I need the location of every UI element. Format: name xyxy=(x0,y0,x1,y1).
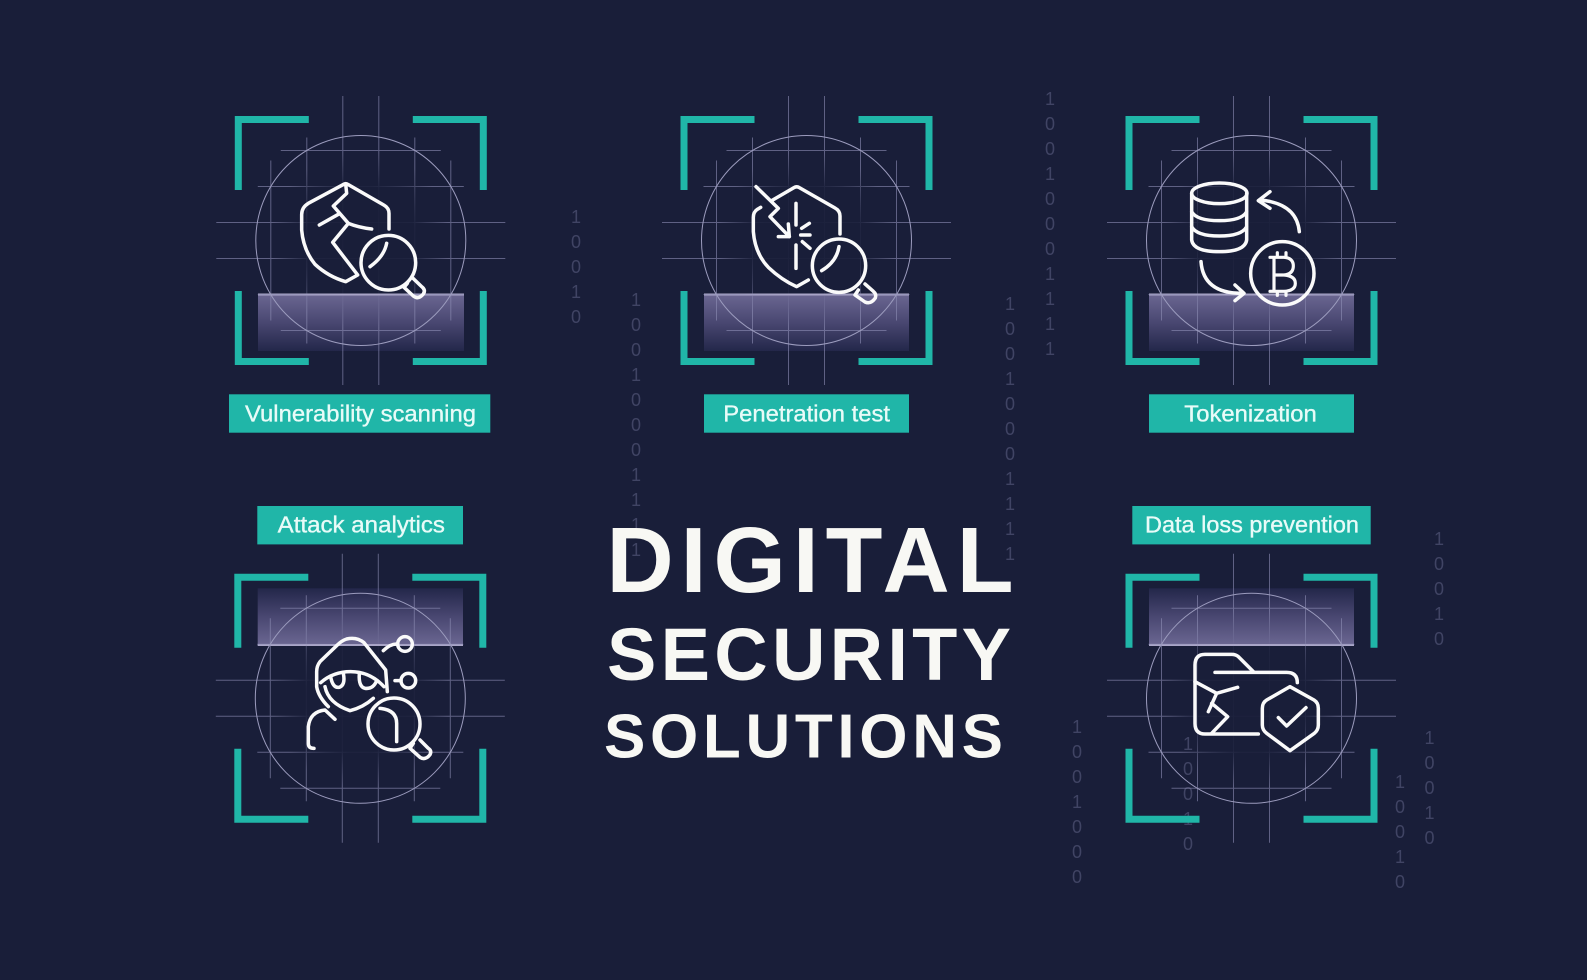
corner brackets xyxy=(1129,577,1374,819)
binary column left centre: 1 xyxy=(631,465,641,485)
binary column right centre: 1 xyxy=(1005,494,1015,514)
panel: data loss prevention xyxy=(1107,506,1396,843)
binary column left centre: 1 xyxy=(631,540,641,560)
binary column top centre: 1 xyxy=(1045,314,1055,334)
binary column top centre: 1 xyxy=(1045,89,1055,109)
icon: cracked folder with shield xyxy=(1195,654,1318,751)
binary column top centre: 0 xyxy=(1045,114,1055,134)
binary column lower right a: 0 xyxy=(1395,822,1405,842)
circle xyxy=(256,136,466,346)
binary column lower right b: 0 xyxy=(1424,778,1435,798)
binary column lower left of data loss panel: 0 xyxy=(1072,817,1082,837)
binary column lower right b: 1 xyxy=(1424,728,1435,748)
binary column top centre: 1 xyxy=(1045,339,1055,359)
binary column left centre: 0 xyxy=(631,340,641,360)
binary column top centre: 0 xyxy=(1045,139,1055,159)
binary column lower left of data loss panel: 1 xyxy=(1072,717,1082,737)
binary column right centre: 1 xyxy=(1005,519,1015,539)
binary column right centre: 1 xyxy=(1005,294,1015,314)
binary column right centre: 0 xyxy=(1005,419,1015,439)
binary column right centre: 0 xyxy=(1005,319,1015,339)
circle xyxy=(1146,136,1356,346)
corner brackets xyxy=(1129,120,1374,362)
scan band xyxy=(1149,588,1354,646)
panel: vulnerability scanning xyxy=(216,96,505,433)
label: Data loss prevention: Data loss prevention xyxy=(1145,512,1359,538)
title line: SOLUTIONS: SOLUTIONS xyxy=(604,702,1003,772)
icon: cracked shield with magnifier xyxy=(302,184,424,298)
binary column far right: 0 xyxy=(1434,554,1444,574)
label: Tokenization xyxy=(1149,394,1354,433)
binary column right centre: 1 xyxy=(1005,469,1015,489)
binary column lower right a: 0 xyxy=(1395,797,1405,817)
title xyxy=(604,508,1014,772)
binary column left centre: 1 xyxy=(631,290,641,310)
binary column left centre: 1 xyxy=(631,490,641,510)
binary column lower left of data loss panel: 0 xyxy=(1072,767,1082,787)
grid lines xyxy=(1107,96,1396,385)
panel: penetration test xyxy=(662,96,951,433)
binary column lower right a: 1 xyxy=(1395,772,1405,792)
binary column right centre: 0 xyxy=(1005,344,1015,364)
grid lines xyxy=(216,554,505,843)
label: Attack analytics xyxy=(257,506,463,544)
binary column right centre: 0 xyxy=(1005,444,1015,464)
binary column top centre: 0 xyxy=(1045,189,1055,209)
scan band xyxy=(258,294,464,351)
binary column far right: 1 xyxy=(1434,604,1444,624)
title line: DIGITAL: DIGITAL xyxy=(606,508,1014,612)
binary column inside data loss panel: 1 xyxy=(1183,809,1193,829)
label: Tokenization: Tokenization xyxy=(1184,400,1317,426)
circle xyxy=(255,593,465,803)
binary column far right: 1 xyxy=(1434,529,1444,549)
binary column top centre: 0 xyxy=(1045,239,1055,259)
binary column inside data loss panel: 1 xyxy=(1183,734,1193,754)
label: Penetration test xyxy=(704,394,909,433)
grid lines xyxy=(1107,554,1396,843)
binary column left centre: 1 xyxy=(631,365,641,385)
binary column left centre: 0 xyxy=(631,390,641,410)
binary column lower left of data loss panel: 0 xyxy=(1072,842,1082,862)
icon: database and bitcoin exchange xyxy=(1192,183,1314,305)
scan band xyxy=(1149,294,1354,351)
panel: attack analytics xyxy=(216,506,505,843)
binary column far left top: 0 xyxy=(571,307,581,327)
binary column left centre: 0 xyxy=(631,315,641,335)
binary column lower left of data loss panel: 0 xyxy=(1072,742,1082,762)
binary column inside data loss panel: 0 xyxy=(1183,784,1193,804)
binary column inside data loss panel: 0 xyxy=(1183,759,1193,779)
label: Vulnerability scanning: Vulnerability scanning xyxy=(245,400,476,426)
binary column inside data loss panel: 0 xyxy=(1183,834,1193,854)
icon: shield with attack arrow and magnifier xyxy=(753,187,876,303)
binary column lower right b: 0 xyxy=(1424,753,1435,773)
scan band xyxy=(704,294,909,351)
grid lines xyxy=(216,96,505,385)
corner brackets xyxy=(684,120,929,362)
binary column lower right b: 1 xyxy=(1424,803,1435,823)
scan band xyxy=(258,588,463,646)
label: Data loss prevention xyxy=(1132,506,1371,544)
binary column top centre: 1 xyxy=(1045,264,1055,284)
binary column far right: 0 xyxy=(1434,579,1444,599)
icon: hooded hacker with magnifier xyxy=(308,637,431,759)
binary column lower right a: 0 xyxy=(1395,872,1405,892)
binary column far left top: 1 xyxy=(571,207,581,227)
binary column right centre: 1 xyxy=(1005,544,1015,564)
binary column far left top: 1 xyxy=(571,282,581,302)
grid lines xyxy=(662,96,951,385)
binary column left centre: 0 xyxy=(631,415,641,435)
binary column top centre: 1 xyxy=(1045,164,1055,184)
binary column lower right a: 1 xyxy=(1395,847,1405,867)
binary column lower right b: 0 xyxy=(1424,828,1435,848)
binary column right centre: 1 xyxy=(1005,369,1015,389)
circle xyxy=(702,136,912,346)
binary column far right: 0 xyxy=(1434,629,1444,649)
label: Vulnerability scanning xyxy=(229,394,490,433)
binary column left centre: 1 xyxy=(631,515,641,535)
binary column lower left of data loss panel: 0 xyxy=(1072,867,1082,887)
corner brackets xyxy=(238,120,483,362)
label: Penetration test: Penetration test xyxy=(723,400,891,426)
binary column left centre: 0 xyxy=(631,440,641,460)
binary column top centre: 1 xyxy=(1045,289,1055,309)
circle xyxy=(1146,593,1356,803)
corner brackets xyxy=(238,577,483,819)
binary column top centre: 0 xyxy=(1045,214,1055,234)
binary column lower left of data loss panel: 1 xyxy=(1072,792,1082,812)
binary column far left top: 0 xyxy=(571,257,581,277)
label: Attack analytics: Attack analytics xyxy=(278,512,445,538)
title line: SECURITY: SECURITY xyxy=(607,613,1011,696)
panel: tokenization xyxy=(1107,96,1396,433)
binary column far left top: 0 xyxy=(571,232,581,252)
binary column right centre: 0 xyxy=(1005,394,1015,414)
